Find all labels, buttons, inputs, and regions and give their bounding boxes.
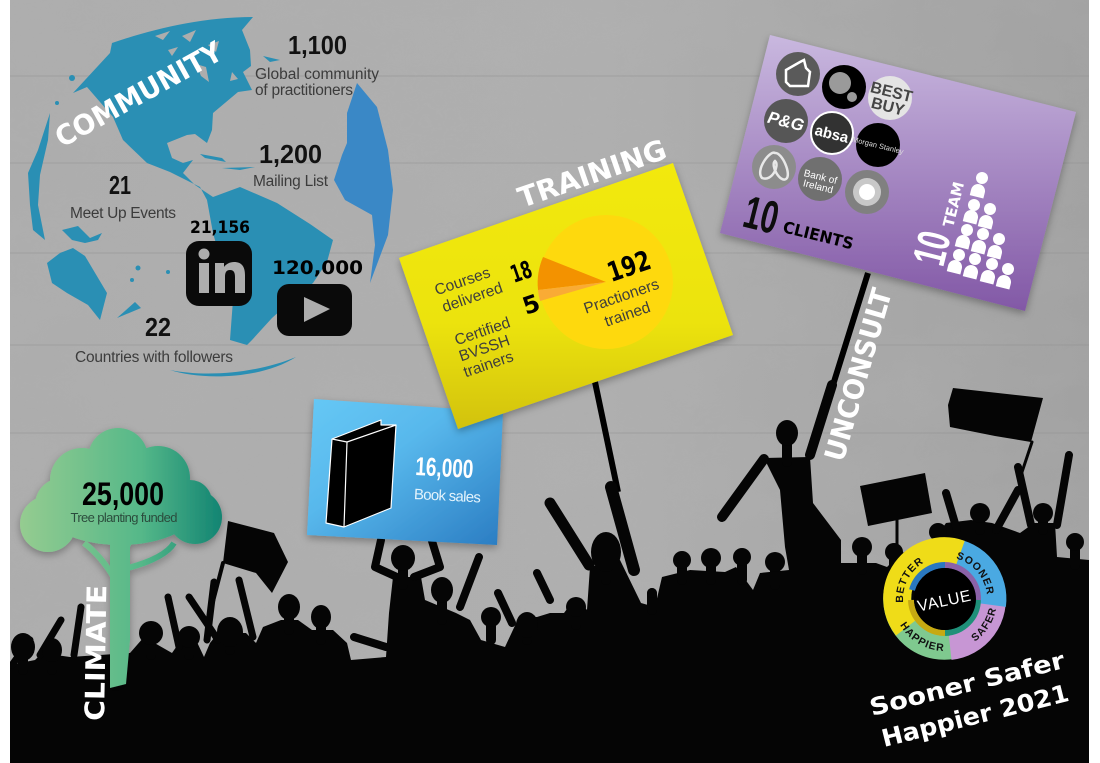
crowd silhouette: [10, 385, 1089, 763]
title: sooner safer happier 2021: [867, 646, 1072, 753]
ring: green happier: [897, 590, 960, 646]
poster stick: training: [595, 382, 618, 492]
logo: value ring: [883, 537, 1006, 660]
island: Caribbean: [200, 154, 255, 170]
arms and poles: [12, 385, 1075, 670]
logo: bank of ireland: Ireland: [802, 178, 834, 196]
island: New Guinea: [62, 226, 102, 243]
logo: value ring: SAFER: [972, 608, 996, 641]
text labels: training: Certified: [452, 314, 513, 349]
continent: Australia: [47, 248, 107, 320]
stat: 1,100 global community: 1,100: [288, 30, 347, 60]
island: Iceland: [263, 56, 280, 62]
logo: value ring: VALUE: [916, 588, 972, 616]
icon: linkedin: [186, 241, 252, 306]
stat: 120,000 youtube: [272, 257, 363, 336]
stat: 120,000 youtube: 120,000: [272, 257, 363, 279]
icon: book: [326, 420, 396, 527]
logo: morgan stanley: Morgan Stanley: [851, 135, 905, 156]
stat: 25,000 trees: [70, 476, 178, 525]
stat: 25,000 trees: Tree planting funded: [70, 510, 178, 525]
placard: [860, 473, 932, 526]
logo: value ring: HAPPIER: [900, 622, 944, 652]
text labels: training: BVSSH: [457, 332, 512, 365]
stat: 10 clients: [739, 185, 855, 253]
flag: right: [948, 388, 1043, 442]
logo: bank of ireland: Bank of: [803, 168, 838, 187]
title: sooner safer happier 2021: Sooner Safer: [867, 646, 1068, 722]
heading: training: TRAINING: [514, 133, 671, 215]
heads: [11, 420, 1084, 662]
stat: 22 countries: [75, 312, 233, 366]
logo: morgan stanley: [851, 123, 905, 167]
logo: bank of ireland: [798, 157, 842, 201]
stat: 10 team: TEAM: [939, 180, 968, 229]
icon: team pyramid: [947, 172, 1014, 290]
text labels: training: 192: [603, 245, 655, 289]
island: New Zealand: [117, 302, 141, 318]
logo: dwelling: [776, 52, 820, 96]
ice: Antarctica: [170, 357, 296, 376]
stat: 1,100 global community: [255, 30, 379, 99]
stat: 1,100 global community: Global community: [255, 66, 379, 83]
icon: youtube: [277, 284, 352, 336]
globe map: [28, 17, 393, 376]
pie chart: practitioners: [538, 215, 673, 349]
continent: Europe and Africa: [334, 83, 393, 283]
stat: 1,200 mailing list: [253, 139, 329, 190]
logo: P&G: [764, 99, 808, 143]
ring: yellow better: [897, 551, 960, 627]
text labels: training: Practioners: [582, 276, 662, 318]
logo: sunburst: [845, 170, 889, 214]
stat: 21,156 linkedin: 21,156: [190, 218, 250, 238]
stat: 16,000 book sales: 16,000: [415, 451, 474, 484]
islands: south-east Asia: [28, 113, 50, 240]
text labels: training: delivered: [440, 279, 505, 316]
stat: 21 meet up events: 21: [109, 170, 131, 200]
stat: 22 countries: 22: [145, 312, 171, 342]
logo: absa: absa: [813, 122, 851, 147]
logo: best buy: BUY: [869, 95, 906, 120]
stat: 21,156 linkedin: [186, 218, 252, 306]
stat: 16,000 book sales: Book sales: [414, 486, 481, 506]
text labels: training: Courses: [432, 264, 493, 299]
logo: airbnb: [752, 145, 796, 189]
title: sooner safer happier 2021: Happier 2021: [879, 679, 1072, 753]
tree: climate: [20, 428, 222, 688]
heading: unconsult: UNCONSULT: [818, 285, 899, 465]
stat: 1,200 mailing list: 1,200: [259, 139, 322, 169]
client logos: [752, 52, 914, 214]
necks: [23, 433, 1075, 670]
text labels: training: trained: [602, 299, 653, 330]
ground and bodies: [10, 457, 1089, 763]
stat: 10 team: 10: [902, 226, 961, 270]
poster stick: unconsult: [833, 273, 868, 385]
ring: purple safer: [950, 590, 992, 646]
flag: left: [223, 521, 288, 593]
stat: 10 clients: 10: [739, 185, 784, 244]
stat: 25,000 trees: 25,000: [82, 476, 164, 512]
stat: 21 meet up events: [70, 170, 176, 222]
poster: book sales: [307, 399, 503, 545]
text labels: training: [432, 245, 662, 381]
logo: value ring: BETTER: [896, 558, 924, 602]
stat: 10 team: [902, 180, 968, 270]
logo: circles: [822, 65, 866, 109]
ring: blue sooner: [950, 552, 992, 605]
stat: 22 countries: Countries with followers: [75, 349, 233, 366]
heading: climate: CLIMATE: [80, 585, 113, 721]
stat: 1,200 mailing list: Mailing List: [253, 173, 329, 190]
logo: P&G: P&G: [766, 108, 806, 135]
logo: value ring: SOONER: [956, 552, 994, 594]
stat: 10 clients: CLIENTS: [781, 217, 855, 253]
stat: 21 meet up events: Meet Up Events: [70, 205, 176, 222]
ring shading inner: [911, 565, 978, 633]
stat: 16,000 book sales: [414, 451, 483, 506]
logo: best buy: BEST: [869, 79, 914, 106]
heading: community: COMMUNITY: [49, 35, 229, 154]
arctic sea gaps: [155, 30, 238, 82]
text labels: training: trainers: [461, 348, 516, 381]
continent: North and South America: [73, 17, 333, 345]
text labels: training: 18: [507, 255, 536, 289]
text labels: training: 5: [519, 289, 544, 321]
poster: unconsult: [720, 35, 1076, 311]
logo: best buy: [865, 76, 914, 121]
poster: training: [399, 163, 733, 429]
logo: absa: [811, 112, 853, 154]
stat: 1,100 global community: of practitioners: [255, 82, 353, 99]
